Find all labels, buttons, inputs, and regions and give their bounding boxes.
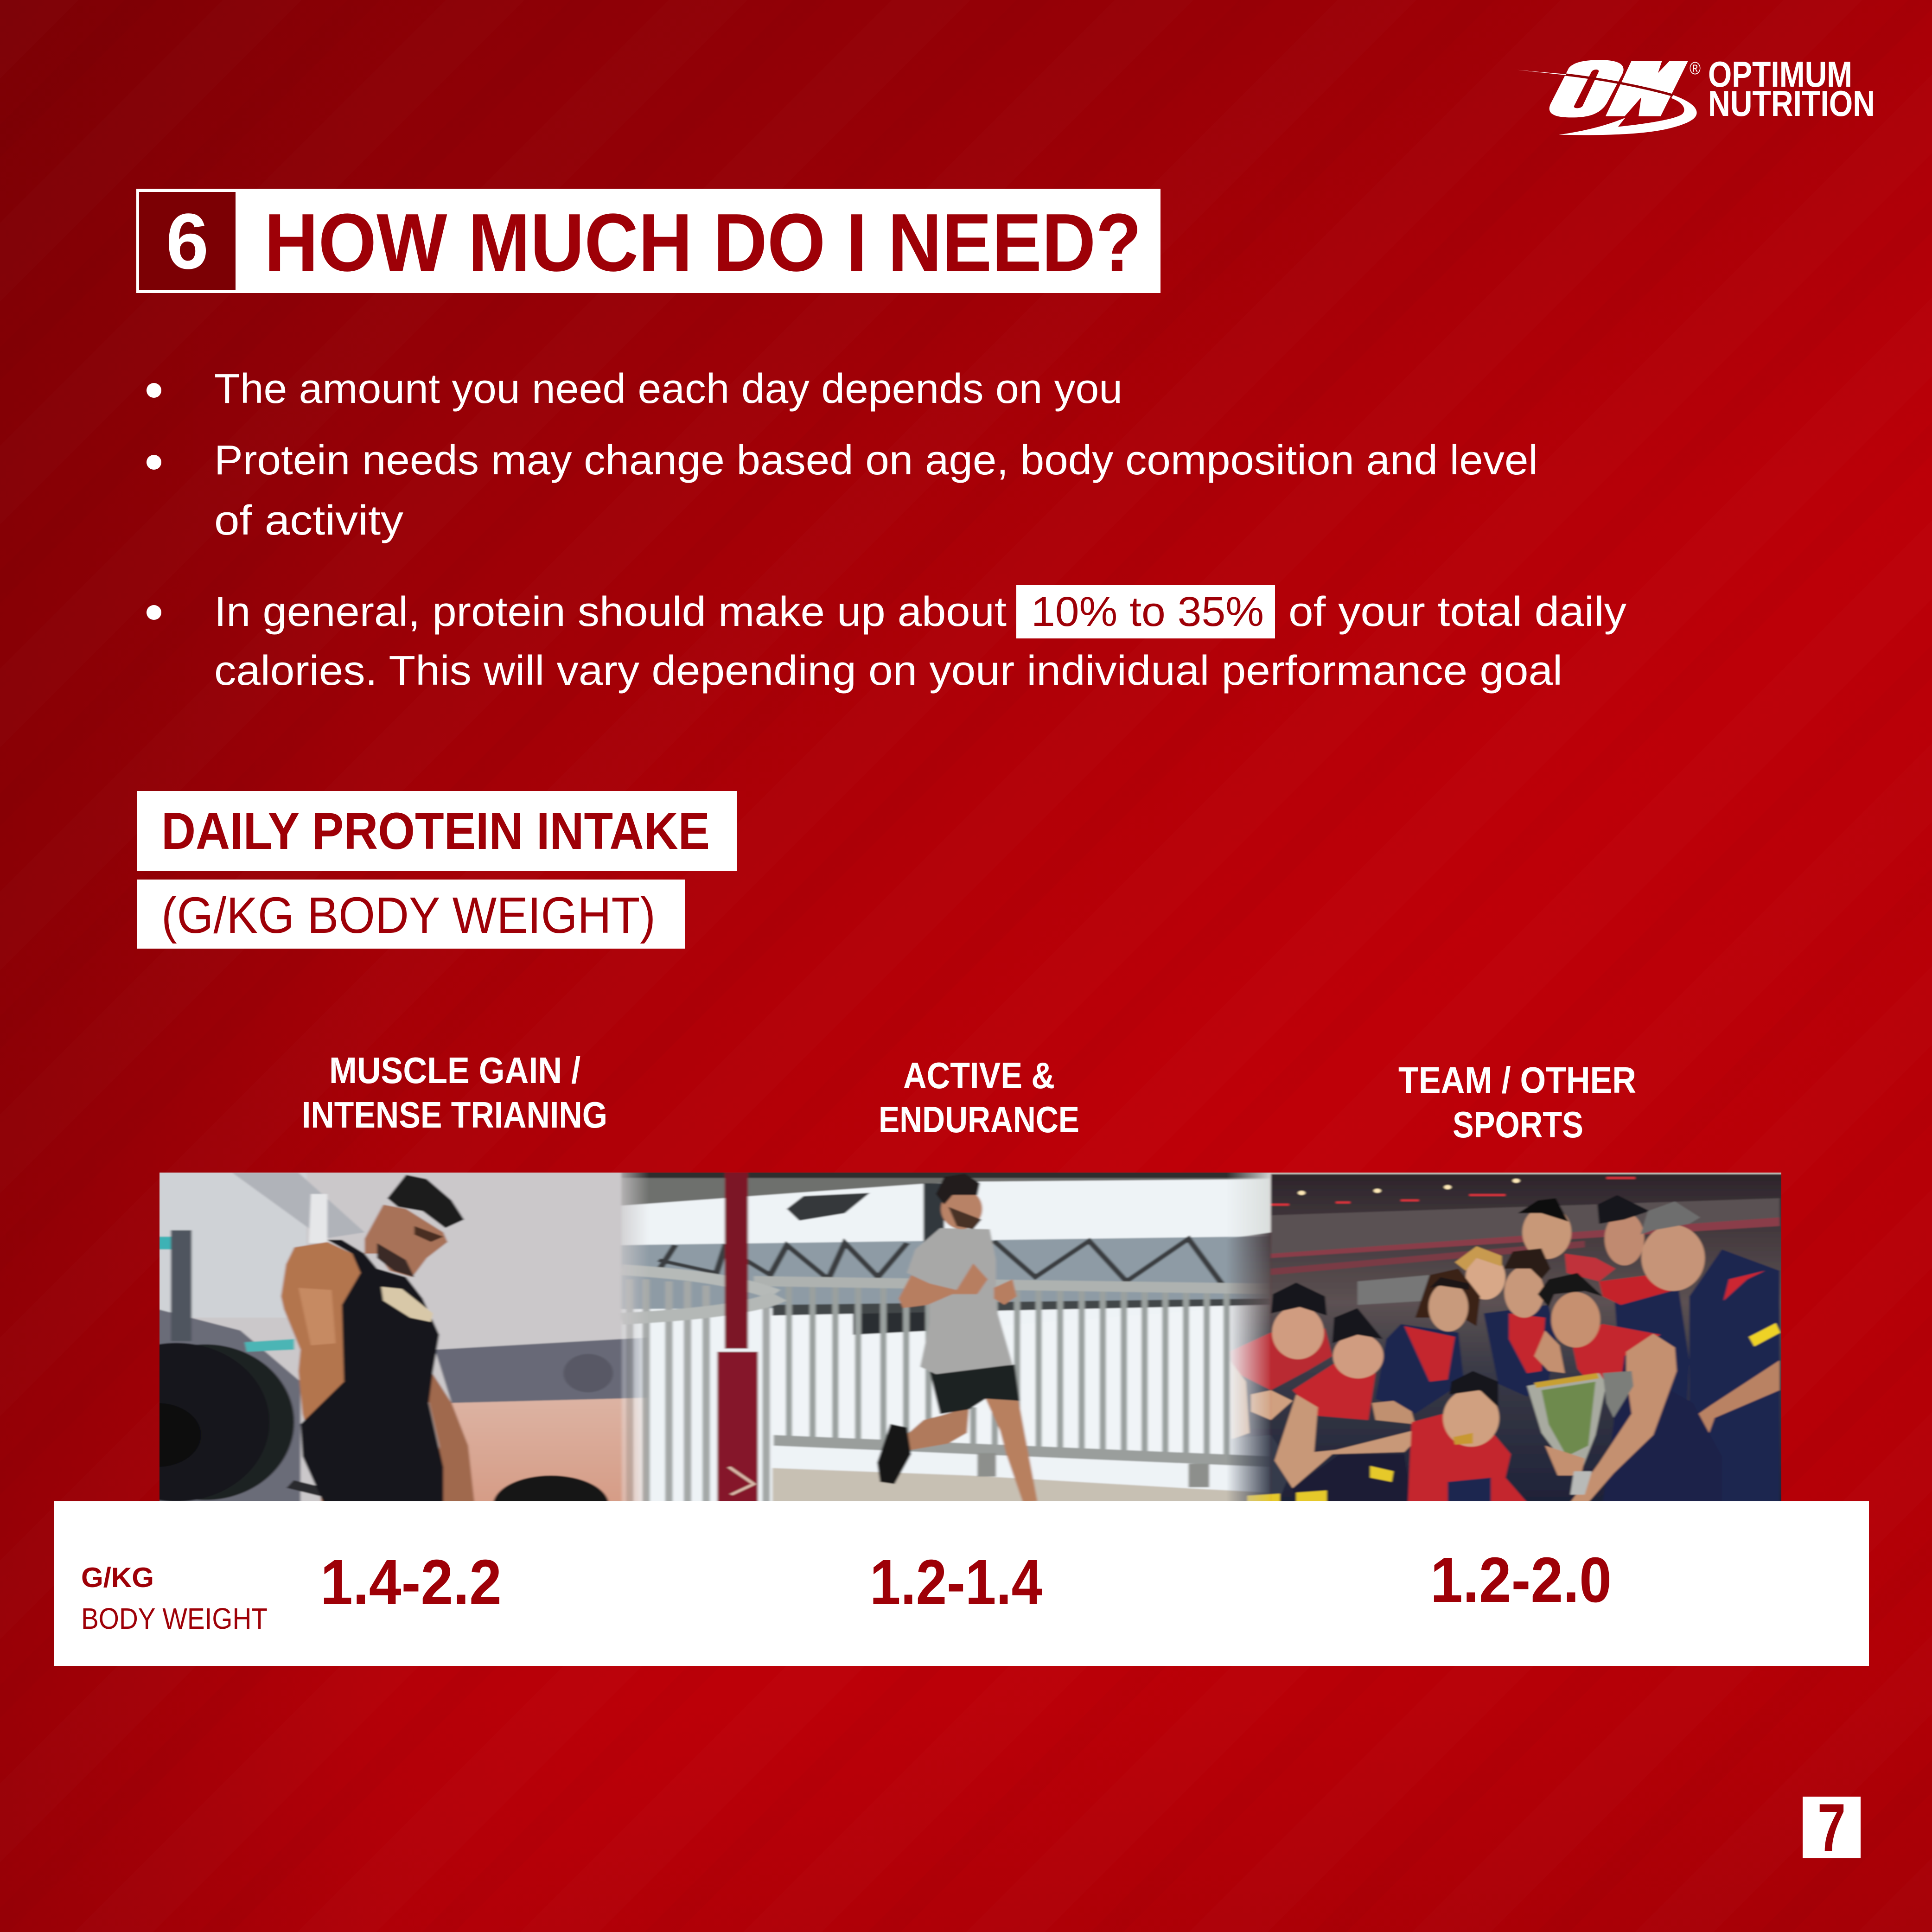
unit label: G/KG: [81, 1562, 154, 1593]
bullet 1: The amount you need each day depends on you: [214, 366, 1122, 412]
value: team sports: 1.2-2.0: [1430, 1544, 1612, 1616]
truss: [658, 1239, 1222, 1283]
bottom player: [1408, 1414, 1527, 1502]
photo: runner on bridge: [621, 1168, 1270, 1503]
left players: [1230, 1328, 1332, 1390]
trophy: [1527, 1373, 1607, 1471]
bullet 2: of activity: [214, 497, 403, 544]
highlight: 10% to 35%: 10% to 35%: [1031, 589, 1264, 635]
column heading: muscle gain: MUSCLE GAIN /: [329, 1050, 580, 1091]
column heading: team and other sports: SPORTS: [1453, 1104, 1583, 1145]
column heading: muscle gain: [302, 1050, 607, 1135]
bullet 3: calories. This will vary depending on your individual performance goal: [214, 648, 1562, 694]
column heading: active and endurance: [879, 1055, 1079, 1140]
bullet list: [147, 366, 1626, 694]
value: muscle gain: 1.4-2.2: [320, 1547, 502, 1618]
subheading text one: DAILY PROTEIN INTAKE: [161, 802, 710, 860]
left curved rail: [630, 1279, 766, 1502]
section number: 6: [166, 198, 209, 286]
data bar: [54, 1501, 1869, 1666]
runner figure: [877, 1174, 1037, 1502]
bullet 3: [147, 585, 1626, 694]
photo: weightlifter in gym: [159, 1173, 648, 1501]
unit label: [81, 1562, 268, 1635]
bullet 3: In general, protein should make up about: [214, 589, 1007, 635]
subheading text two: (G/KG BODY WEIGHT): [161, 887, 656, 944]
front player with trophy: [1603, 1360, 1722, 1502]
icon: ON swoosh mark: [1517, 60, 1697, 135]
registered mark: ®: [1690, 59, 1701, 78]
painted post: [725, 1172, 748, 1349]
column heading: active and endurance: ACTIVE &: [903, 1055, 1055, 1096]
logo word: OPTIMUM: OPTIMUM: [1708, 54, 1852, 95]
data bar background: [54, 1501, 1869, 1666]
subheading box one: [137, 791, 737, 871]
column heading: team and other sports: TEAM / OTHER: [1398, 1059, 1636, 1101]
column heading: active and endurance: ENDURANCE: [879, 1099, 1079, 1140]
title banner: [136, 189, 1160, 293]
bullet 2: Protein needs may change based on age, body composition and level: [214, 437, 1538, 484]
logo word: NUTRITION: NUTRITION: [1708, 83, 1875, 124]
photo: team with trophy: [1224, 1168, 1790, 1503]
bullet 2: [147, 437, 1538, 544]
stadium lights and stands: [1224, 1172, 1790, 1305]
number box: [139, 192, 236, 290]
highlight box: [1016, 585, 1275, 638]
column heading: team and other sports: [1398, 1059, 1636, 1145]
subheading: daily protein intake: [137, 791, 737, 949]
subheading box two: [137, 880, 685, 949]
railing balusters: [789, 1287, 1227, 1461]
title text: HOW MUCH DO I NEED?: [264, 197, 1141, 288]
athlete: [281, 1175, 474, 1502]
page number: 7: [1817, 1790, 1846, 1865]
players: [1224, 1195, 1780, 1502]
barbell plates: [83, 1343, 609, 1535]
unit label: BODY WEIGHT: [81, 1602, 268, 1635]
page number: [1803, 1790, 1861, 1865]
column heading: muscle gain: INTENSE TRIANING: [302, 1094, 607, 1135]
photo strip: [159, 1173, 1781, 1501]
bullet 3: of your total daily: [1288, 589, 1626, 635]
value: endurance: 1.2-1.4: [870, 1547, 1042, 1618]
banner background: [136, 189, 1160, 293]
logo: Optimum Nutrition: [1517, 54, 1875, 135]
